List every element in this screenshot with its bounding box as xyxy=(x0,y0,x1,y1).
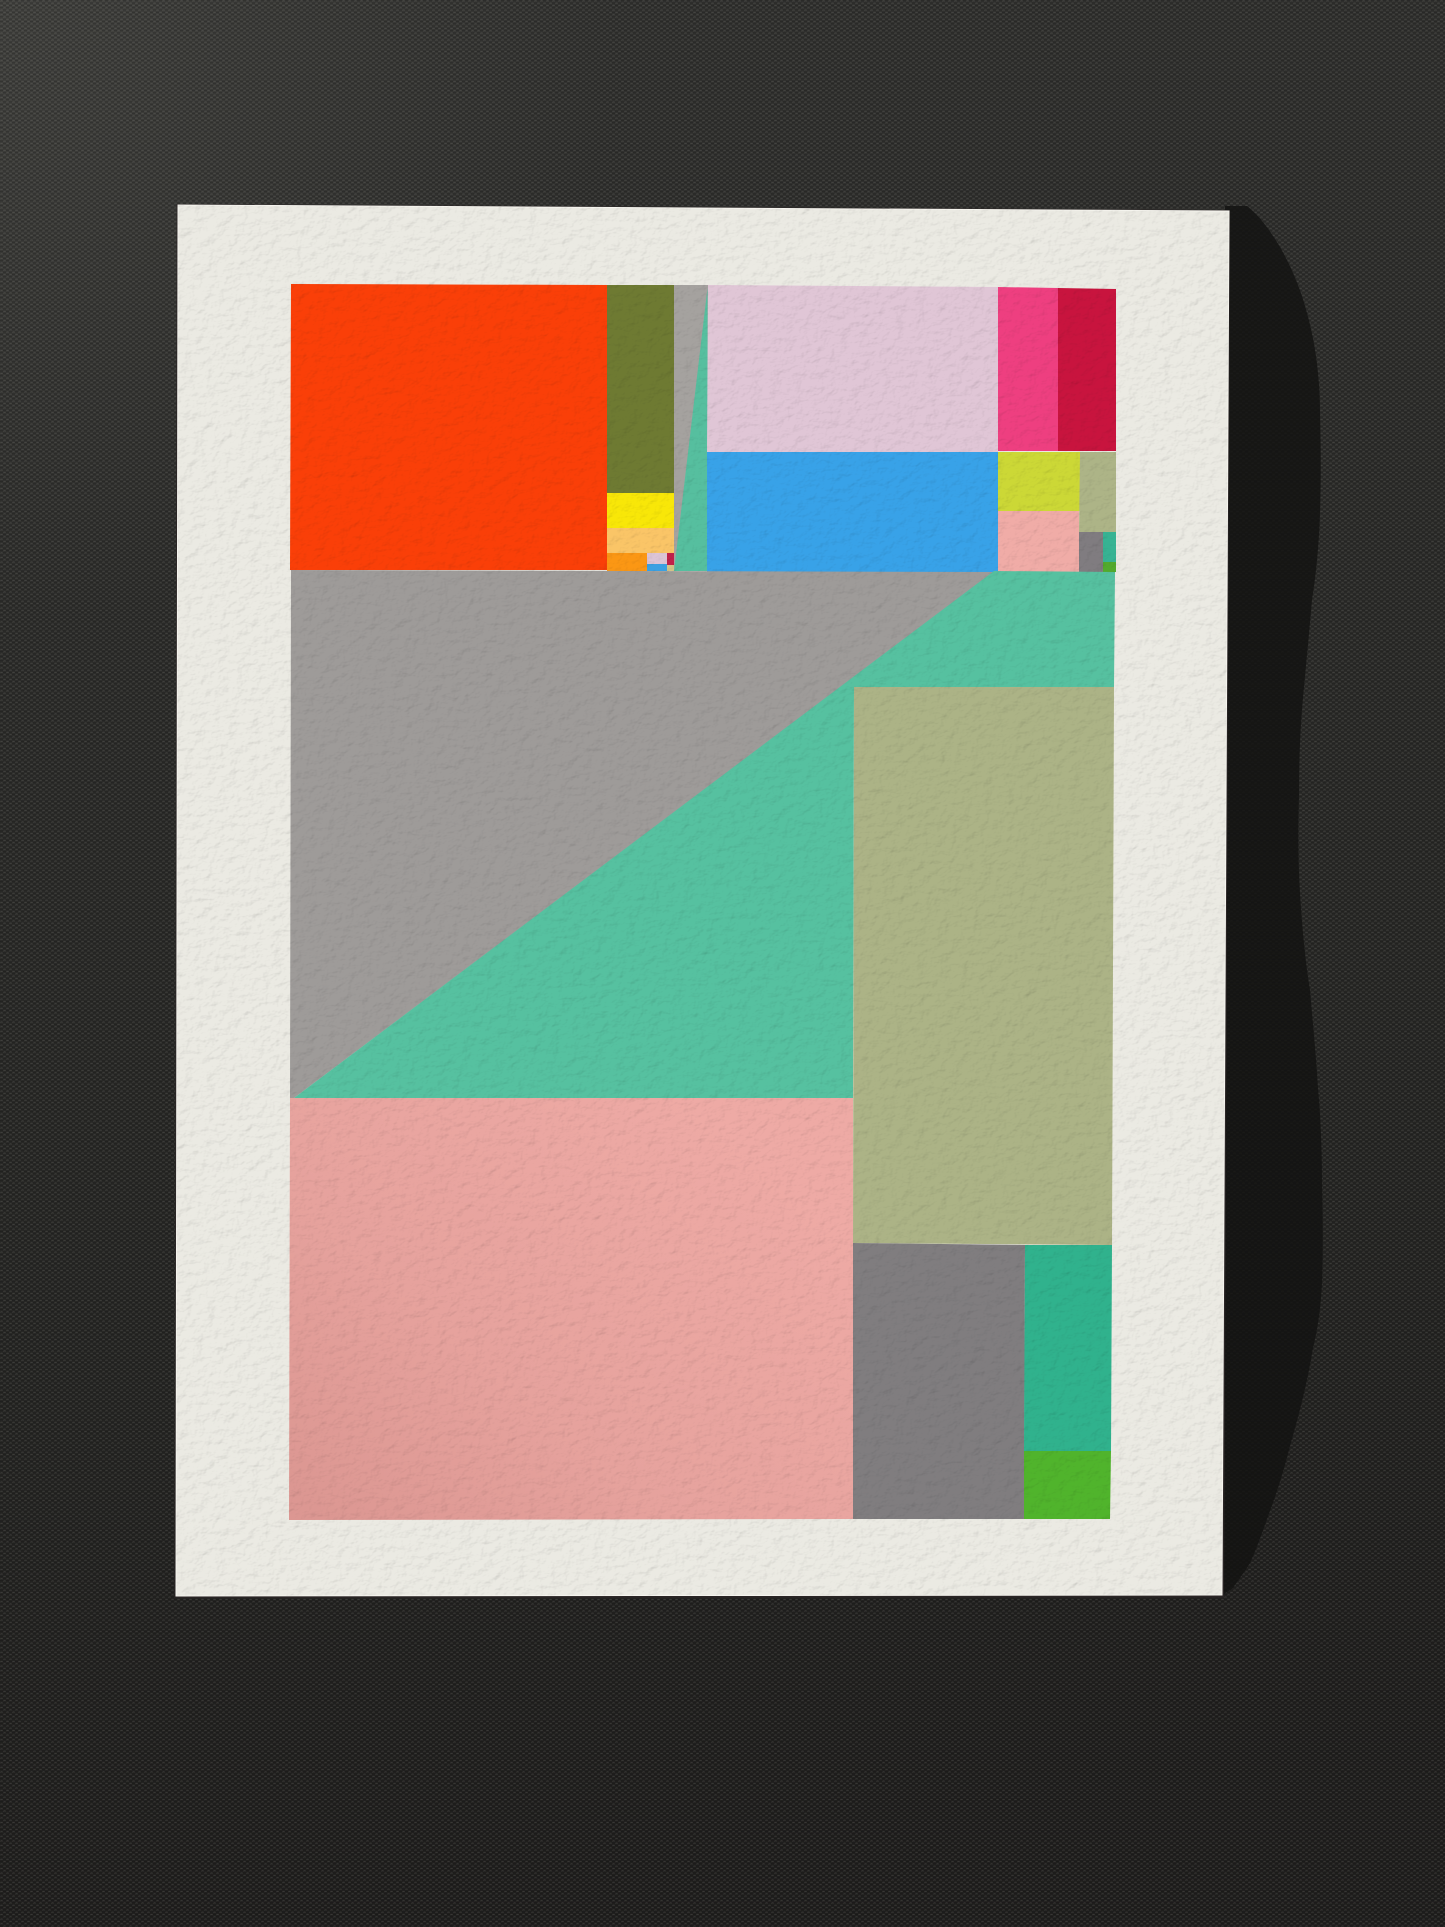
top band: red square xyxy=(290,284,607,570)
top band: grey column with teal sliver xyxy=(674,285,708,571)
top band: crimson rectangle xyxy=(1058,288,1116,451)
large sage rectangle xyxy=(853,687,1114,1245)
top band: lime rectangle xyxy=(998,452,1080,511)
contact shadow along the paper edge xyxy=(174,204,1230,1598)
paper sheet xyxy=(176,205,1229,1596)
cast shadow right of the paper xyxy=(1224,206,1323,1594)
top band: small grey, teal and green blocks xyxy=(1079,532,1116,572)
large grey triangle xyxy=(290,570,994,1098)
top band: olive and yellow column xyxy=(607,285,674,571)
top band: small pink rectangle xyxy=(998,511,1079,572)
top band: lilac rectangle xyxy=(707,285,998,452)
top band: small sage rectangle xyxy=(1079,452,1116,532)
lower green rectangle xyxy=(1024,1451,1111,1519)
top band: hot pink rectangle xyxy=(998,287,1058,451)
lower teal rectangle xyxy=(1024,1245,1112,1451)
embossed paper texture xyxy=(170,200,1235,1600)
lower grey rectangle xyxy=(853,1243,1025,1519)
artwork: colour-block composition xyxy=(289,284,1116,1520)
large pink rectangle xyxy=(289,1098,853,1520)
large teal shape xyxy=(294,571,1115,1098)
top band: blue rectangle xyxy=(707,452,998,572)
